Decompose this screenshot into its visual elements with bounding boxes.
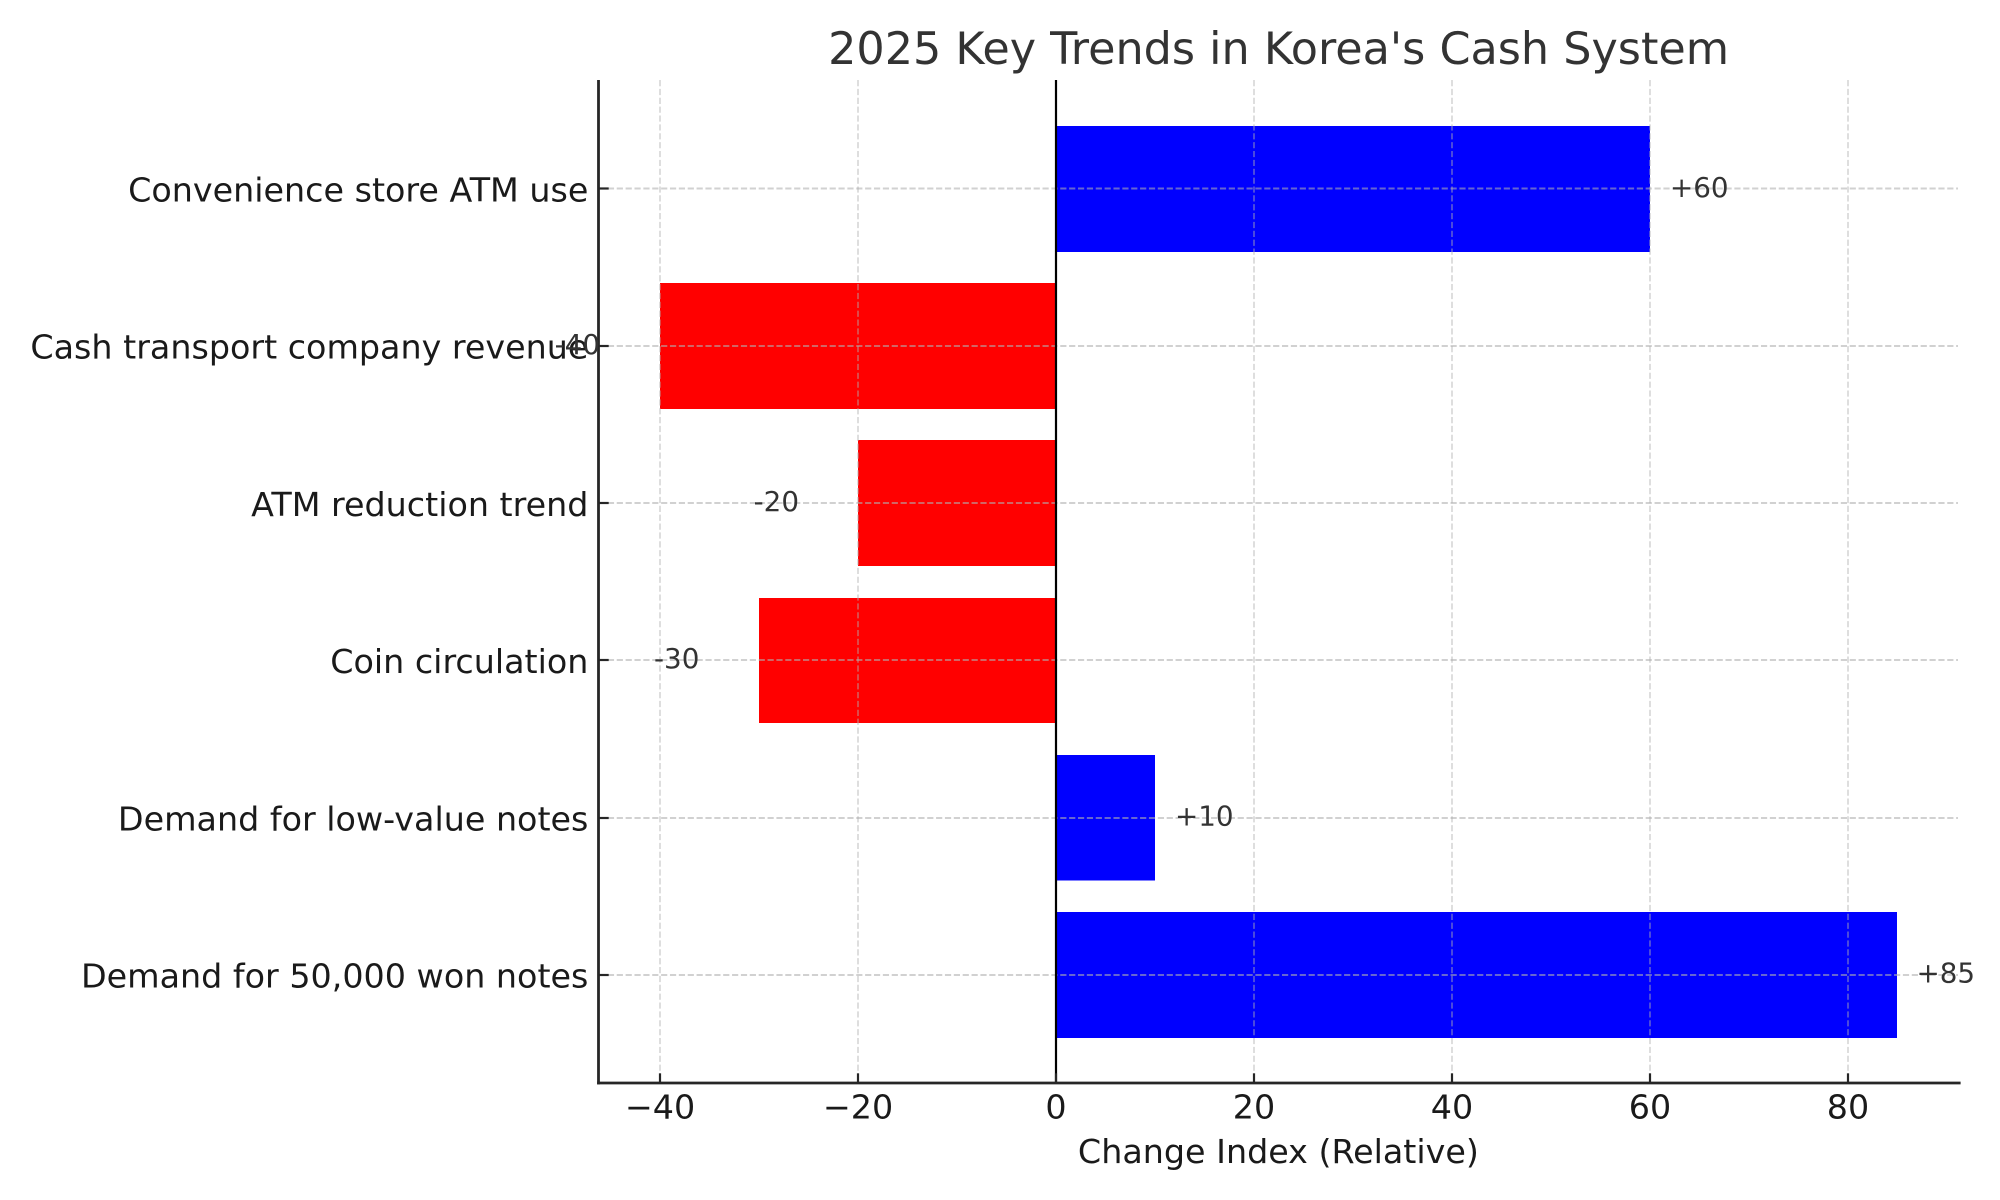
y-axis category labels: Cash transport company revenue — [30, 328, 588, 367]
bar: Demand for 50,000 won notes +85 — [1056, 912, 1897, 1038]
x-axis tick labels: 60 — [1629, 1088, 1671, 1127]
title: 2025 Key Trends in Korea's Cash System — [828, 24, 1729, 75]
data value labels: -30 — [654, 642, 699, 675]
data value labels: +10 — [1175, 800, 1234, 833]
x-axis tick labels: −40 — [625, 1088, 695, 1127]
bar: ATM reduction trend -20 — [858, 440, 1056, 566]
y-axis category labels: Demand for 50,000 won notes — [81, 957, 588, 996]
x-axis tick labels: 40 — [1431, 1088, 1473, 1127]
bar: Convenience store ATM use +60 — [1056, 126, 1650, 252]
data value labels — [555, 171, 1975, 990]
zero line — [1055, 80, 1057, 1083]
y-axis category labels: Demand for low-value notes — [118, 800, 588, 839]
x-axis tick labels — [625, 1088, 1869, 1127]
y-axis category labels: Coin circulation — [330, 642, 588, 681]
data value labels: -20 — [754, 485, 799, 518]
data value labels: +85 — [1916, 957, 1975, 990]
data value labels: +60 — [1670, 171, 1729, 204]
x-axis title: Change Index (Relative) — [1078, 1132, 1479, 1171]
x-axis tick labels: 0 — [1045, 1088, 1067, 1127]
x-axis tick labels: −20 — [823, 1088, 893, 1127]
bars — [660, 126, 1897, 1038]
x-axis tick labels: 80 — [1827, 1088, 1869, 1127]
bar: Demand for low-value notes +10 — [1056, 755, 1155, 880]
y-axis category labels — [30, 170, 588, 996]
bar: Coin circulation -30 — [759, 598, 1056, 723]
y-axis category labels: Convenience store ATM use — [128, 170, 588, 210]
y-axis category labels: ATM reduction trend — [251, 485, 588, 524]
x-axis tick labels: 20 — [1233, 1088, 1275, 1127]
bar: Cash transport company revenue -40 — [660, 283, 1056, 409]
axes: spines and tick marks — [597, 80, 1961, 1084]
data value labels: -40 — [555, 328, 600, 361]
